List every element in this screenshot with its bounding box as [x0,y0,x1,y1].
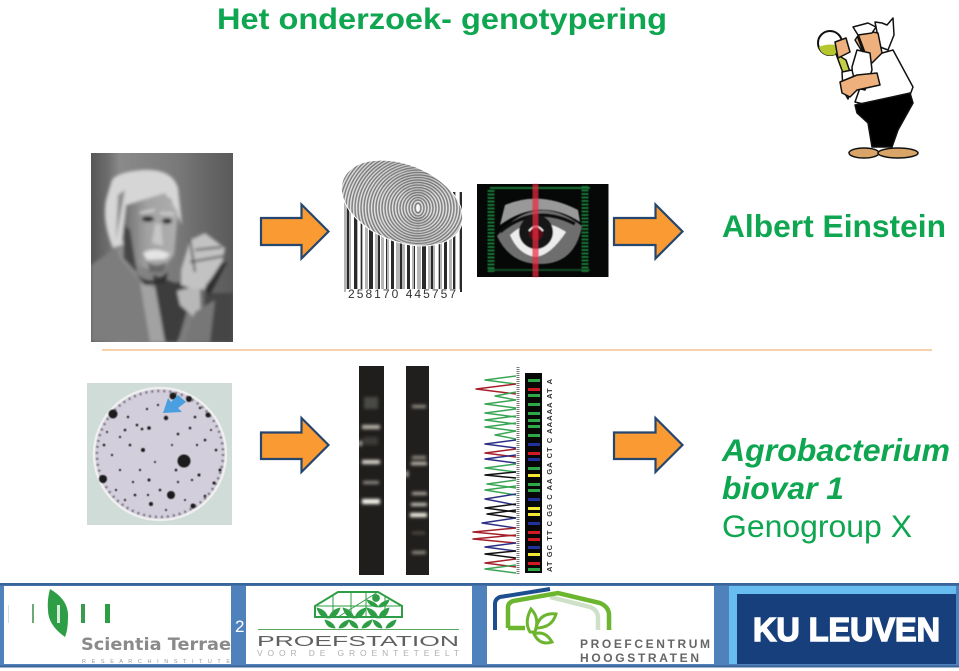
logo: Proefstation: VOOR DE GROENTETEELT [257,648,459,658]
logo: Scientia Terrae [4,586,231,665]
logo: Proefcentrum Hoogstraten [487,586,714,665]
title: Het onderzoek- genotypering [217,3,667,36]
icon: fingerprint with barcode [342,160,462,298]
arrow: dish to gel [261,418,328,472]
logo: KU Leuven [729,586,956,664]
logo: Scientia Terrae: Scientia Terrae [81,635,231,655]
arrow: person to fingerprint [261,204,328,258]
icon: eye scan [477,184,608,277]
photo: Albert Einstein [91,153,233,342]
logo: KU Leuven: KU LEUVEN [753,611,940,648]
arrow: sequence to Agrobacterium [614,418,682,472]
DNA sequence chromatogram: AT GC TT C GG C AA GA CT C AAAAA AT A [545,378,554,572]
label: Agrobacterium biovar 1 Genogroup X: Genogroup X [722,508,912,544]
logo: Proefcentrum Hoogstraten: HOOGSTRATEN [580,651,699,665]
logo: Proefstation [246,586,472,664]
DNA sequence chromatogram [473,367,554,574]
footer logo band [0,583,959,668]
logo: Proefstation: PROEFSTATION [257,634,459,650]
label: Agrobacterium biovar 1 Genogroup X: Agrobacterium [721,432,950,468]
label: Agrobacterium biovar 1 Genogroup X: biovar 1 [722,470,844,506]
label: Albert Einstein: Albert Einstein [722,208,946,244]
logo: Scientia Terrae: R E S E A R C H I N S T I T U T E [82,659,230,665]
arrow: eye to Albert Einstein [614,204,682,258]
photo: petri dish with colonies [87,383,232,525]
label: Agrobacterium biovar 1 Genogroup X [721,432,950,544]
slide number: 2 [235,617,244,636]
logo: Proefcentrum Hoogstraten: PROEFCENTRUM [580,637,710,651]
gel lane 2 [406,366,429,575]
icon: fingerprint with barcode: 258170 445757 [348,287,456,301]
gel lane 1 [359,366,384,575]
icon: cartoon scientist with flask [818,18,918,158]
